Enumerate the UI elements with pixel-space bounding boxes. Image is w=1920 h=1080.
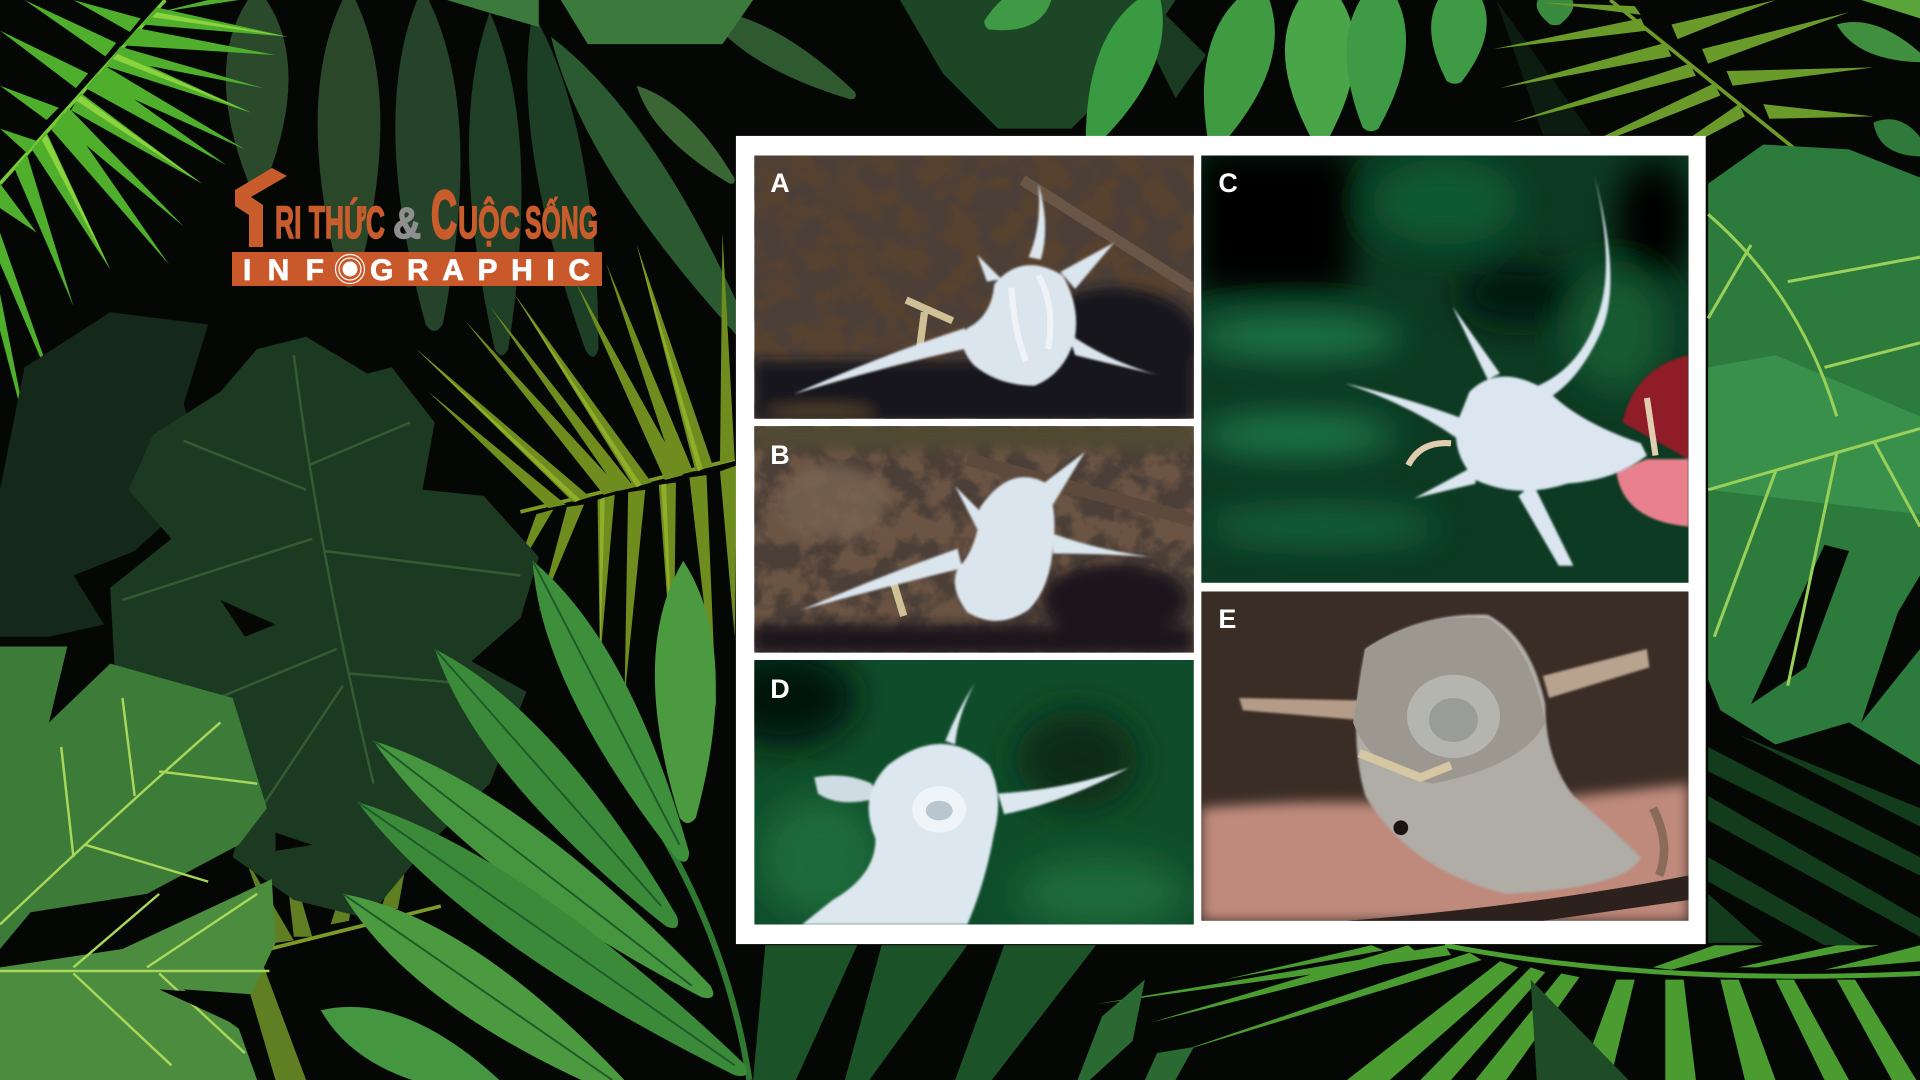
foliage: bright lance leaves at bottom centre: [310, 549, 763, 1080]
letter D: D: [770, 674, 790, 704]
foliage: olive palm frond in the middle: [416, 233, 737, 710]
foliage: dark blades at the bottom centre: [753, 945, 1194, 1080]
foliage: dark palm lower right: [1708, 735, 1920, 945]
logo: big C: C: [431, 177, 457, 253]
logo: Tri Thức & Cuộc Sống Infographic: [232, 168, 602, 287]
photo panel D: [754, 660, 1194, 924]
foliage: bright palm top-left: [0, 0, 288, 447]
photo panel B: [754, 422, 1194, 655]
letter A: A: [770, 168, 790, 198]
logo: infographic bar: INF: [243, 254, 324, 287]
foliage: top centre leaves: [900, 0, 1592, 154]
photo panel A: [754, 156, 1200, 422]
logo: wordmark part 1: RI THỨC: [275, 197, 385, 248]
logo: infographic bar: GRAPHIC: [370, 254, 590, 287]
photo panel E: [1201, 591, 1689, 921]
foliage: olive strips lower left: [0, 808, 441, 1080]
logo: wordmark part 2: UỘC: [458, 197, 520, 248]
logo: ampersand: &: [393, 199, 421, 248]
logo: T mark: [235, 168, 287, 247]
white photo frame: [736, 136, 1706, 944]
photo panel C: [1194, 147, 1690, 583]
foliage: top-right palm frond: [1494, 0, 1920, 171]
foliage: bright palm bottom right: [1096, 945, 1920, 1080]
letter B: B: [770, 440, 790, 470]
foliage: dark blades at top: [226, 0, 864, 361]
letter C: C: [1218, 168, 1238, 198]
logo: infographic bar: [232, 252, 602, 287]
foliage: monstera on the right: [1708, 144, 1920, 765]
foliage: bright monstera bottom-left: [0, 647, 276, 1080]
foliage: dark monstera leaf in centre-left: [0, 312, 539, 918]
panel letters: [770, 168, 1238, 704]
letter E: E: [1218, 604, 1236, 634]
